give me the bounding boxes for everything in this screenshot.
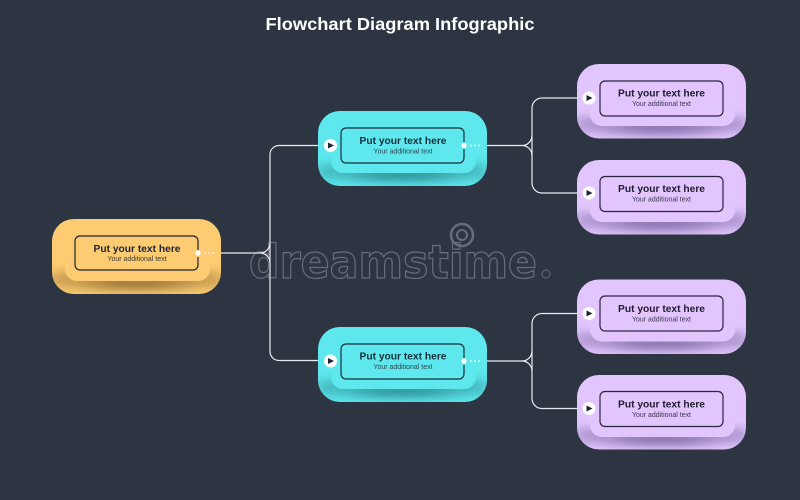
input play icon [582, 402, 596, 415]
sub text: Your additional text [632, 412, 691, 419]
card: root yellow [52, 219, 221, 294]
card shadow [577, 427, 746, 445]
card shadow [577, 332, 746, 350]
card: purple 3 [577, 280, 746, 354]
title: Flowchart Diagram Infographic [266, 14, 535, 34]
card: lower teal [318, 327, 487, 402]
connector: lower branch [482, 314, 577, 408]
sub text: Your additional text [632, 316, 691, 324]
card shadow [577, 212, 746, 230]
output dot [195, 250, 214, 256]
inner text box [75, 236, 198, 270]
input play icon [582, 307, 596, 320]
input play icon [324, 139, 337, 152]
inner text box [341, 128, 464, 163]
raised panel [590, 74, 735, 126]
card shadow [52, 271, 221, 289]
heading text: Put your text here [618, 398, 705, 410]
raised panel [590, 385, 735, 437]
heading text: Put your text here [360, 350, 447, 362]
watermark: dreamstime [249, 235, 537, 289]
inner text box [600, 296, 723, 331]
heading text: Put your text here [618, 88, 705, 100]
input play icon [582, 186, 596, 200]
inner text box [600, 176, 723, 212]
card: purple 2 [577, 160, 746, 234]
card shadow [318, 163, 487, 181]
card: upper teal [318, 111, 487, 186]
connector: root to branches [218, 146, 318, 360]
input play icon [582, 92, 596, 104]
sub text: Your additional text [632, 101, 691, 108]
raised panel [590, 290, 735, 342]
sub text: Your additional text [374, 148, 433, 156]
raised panel [331, 337, 476, 389]
heading text: Put your text here [618, 183, 705, 195]
raised panel [65, 229, 210, 281]
connector: upper branch [482, 98, 577, 193]
inner text box [600, 392, 723, 426]
output dot [461, 143, 480, 148]
sub text: Your additional text [108, 256, 167, 263]
raised panel [590, 170, 735, 222]
output dot [461, 358, 480, 364]
card shadow [318, 379, 487, 397]
heading text: Put your text here [618, 303, 705, 315]
heading text: Put your text here [360, 135, 447, 147]
heading text: Put your text here [94, 243, 181, 255]
sub text: Your additional text [632, 196, 691, 204]
inner text box [341, 344, 464, 379]
raised panel [331, 121, 476, 173]
inner text box [600, 81, 723, 116]
sub text: Your additional text [374, 364, 433, 371]
card: purple 1 [577, 64, 746, 138]
input play icon [324, 354, 337, 368]
card: purple 4 [577, 375, 746, 450]
card shadow [577, 116, 746, 134]
